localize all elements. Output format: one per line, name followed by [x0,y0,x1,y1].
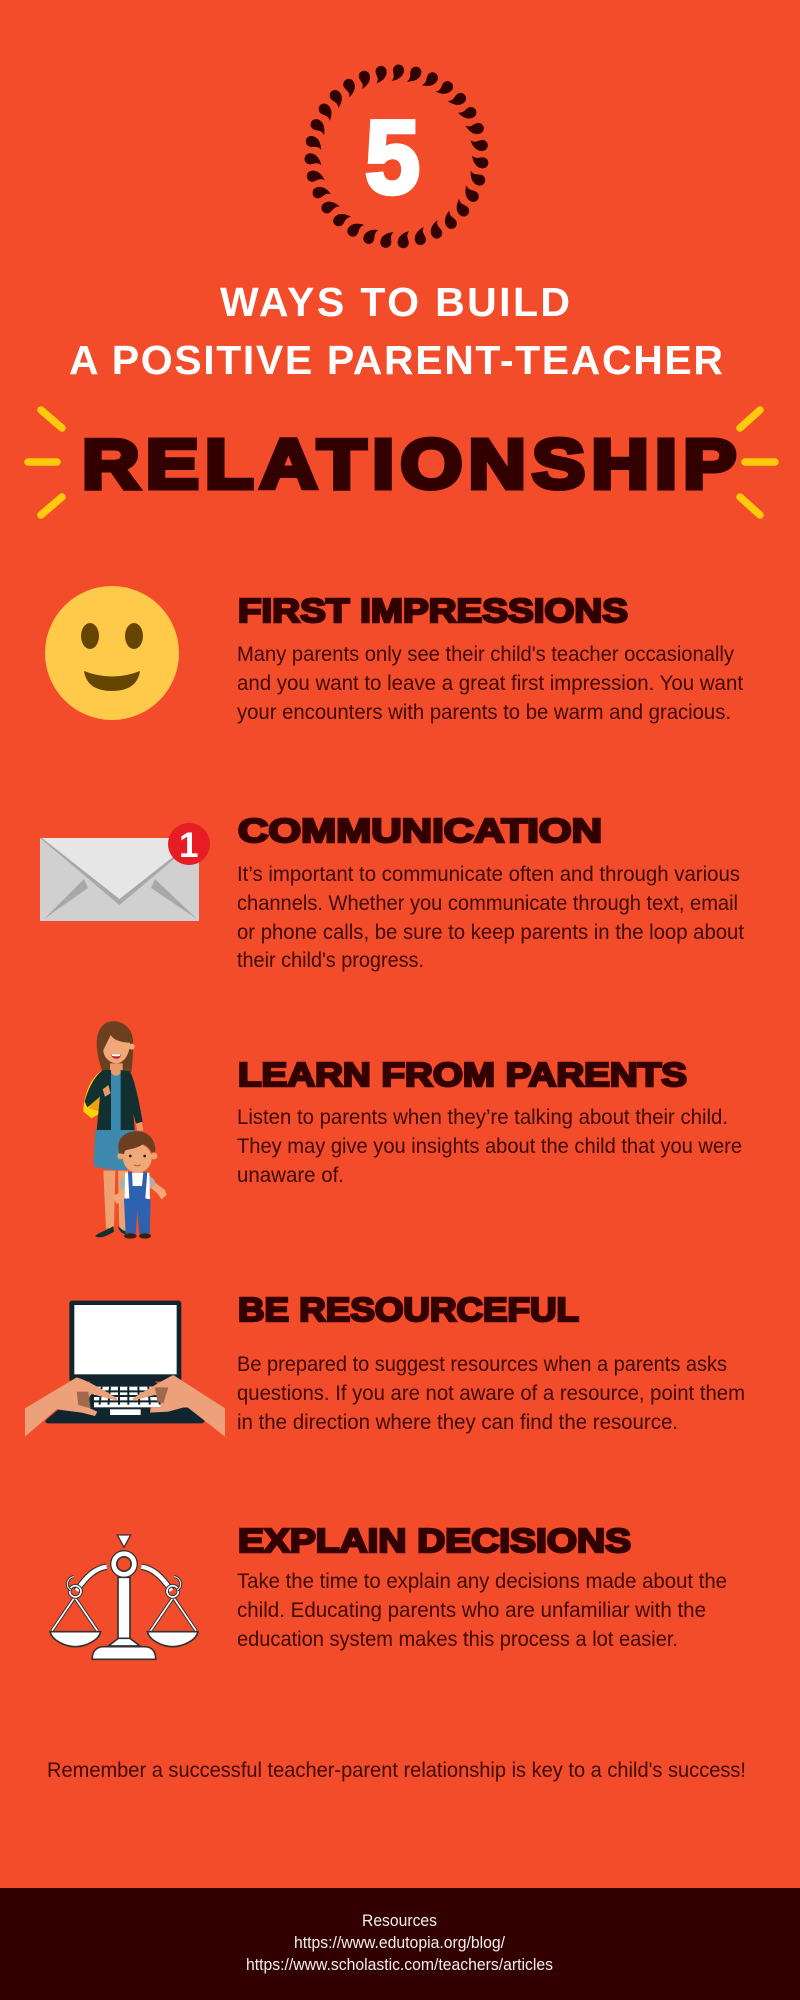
panel: learn from parents [83,1021,742,1239]
heading: learn from parents: LEARN FROM PARENTS [238,1056,687,1093]
link two: https://www.scholastic.com/teachers/articles [246,1955,553,1974]
body text: explain decisions: Take the time to explain any decisions made about the [237,1569,727,1593]
panel: be resourceful [25,1291,745,1437]
icon: mother and child [83,1021,167,1239]
closing statement: Remember a successful teacher-parent relationship is key to a child's success! [47,1758,746,1782]
heading: communication: COMMUNICATION [238,812,602,849]
title line one: WAYS TO BUILD [220,279,570,325]
body text: first impressions [237,642,743,724]
panel: explain decisions [50,1522,727,1659]
title line two: A POSITIVE PARENT-TEACHER [69,337,723,383]
badge: number five in ring of drops [304,64,489,249]
body text: learn from parents: Listen to parents when they’re talking about their child. [237,1105,728,1129]
icon: laptop with typing hands [25,1301,225,1437]
body text: explain decisions [237,1569,727,1651]
body text: communication: or phone calls, be sure to keep parents in the loop about [237,920,744,944]
icon: envelope with notification [40,823,210,921]
resources label: Resources [362,1911,437,1930]
body text: be resourceful: questions. If you are not aware of a resource, point them [237,1381,745,1405]
body text: be resourceful: Be prepared to suggest resources when a parents asks [237,1352,727,1376]
body text: first impressions: and you want to leave a great first impression. You want [237,671,743,695]
icon: smiley face [45,586,179,720]
body text: be resourceful [237,1352,745,1434]
link one: https://www.edutopia.org/blog/ [294,1933,505,1952]
body text: explain decisions: education system makes this process a lot easier. [237,1627,678,1651]
ring of drops [304,64,489,249]
icon: right yellow sparks [740,410,775,515]
body text: first impressions: your encounters with parents to be warm and gracious. [237,700,731,724]
panel: communication [40,812,744,972]
icon: envelope with notification: 1 [179,826,198,865]
body text: communication: channels. Whether you communicate through text, email [237,891,738,915]
heading: first impressions: FIRST IMPRESSIONS [238,592,628,629]
body text: learn from parents: unaware of. [237,1163,344,1187]
footer background [0,1888,800,2000]
number 5: 5 [365,100,420,216]
title keyword: RELATIONSHIP [82,425,736,503]
body text: be resourceful: in the direction where they can find the resource. [237,1410,678,1434]
icon: left yellow sparks [28,410,62,515]
heading: be resourceful: BE RESOURCEFUL [238,1291,579,1328]
body text: learn from parents [237,1105,742,1187]
panel: first impressions [45,586,743,724]
body text: communication [237,862,744,972]
heading: explain decisions: EXPLAIN DECISIONS [238,1522,631,1559]
icon: balance scale [50,1535,198,1659]
footer: resources [0,1888,800,2000]
body text: learn from parents: They may give you insights about the child that you were [237,1134,742,1158]
body text: communication: their child's progress. [237,948,424,972]
body text: explain decisions: child. Educating parents who are unfamiliar with the [237,1598,706,1622]
body text: first impressions: Many parents only see their child's teacher occasionally [237,642,734,666]
title [69,279,736,503]
body text: communication: It’s important to communicate often and through various [237,862,740,886]
